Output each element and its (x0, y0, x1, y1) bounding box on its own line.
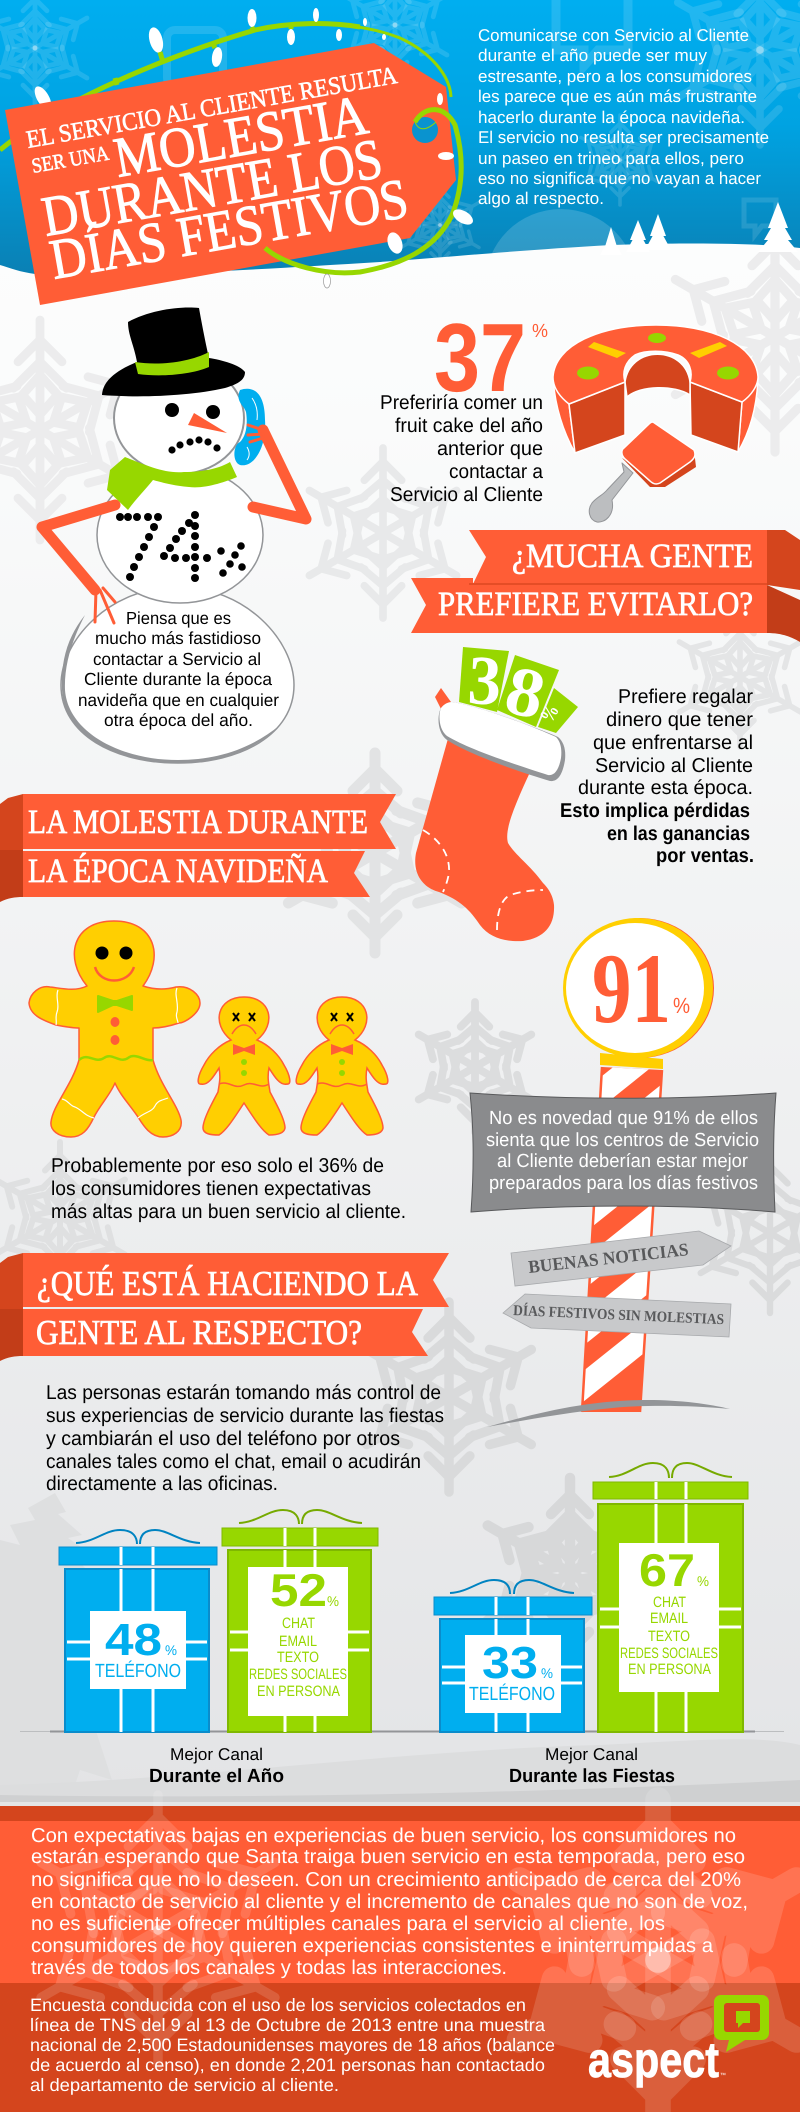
footer summary text: en contacto de servicio al cliente y el incremento de canales que no son de voz, (31, 1891, 748, 1913)
grey sign text: No es novedad que 91% de ellos (489, 1108, 758, 1129)
title: el servicio al cliente resulta: SER UNA (30, 141, 111, 178)
paragraph: control of experiences (46, 1382, 444, 1495)
37% text: anterior que (437, 438, 543, 460)
grey sign text: al Cliente deberían estar mejor (497, 1151, 749, 1172)
caption: durante el ano: Durante el Año (149, 1766, 284, 1787)
grey sign (470, 1093, 776, 1212)
footer summary text: no significa que no lo deseen. Con un crecimiento anticipado de cerca del 20% (31, 1869, 741, 1891)
money 38% (459, 642, 578, 735)
38% text: durante esta época. (578, 777, 753, 799)
banner text: LA ÉPOCA NAVIDEÑA (28, 852, 328, 890)
paragraph: control of experiences: sus experiencias de servicio durante las fiestas (46, 1405, 444, 1427)
gift: 52% otros canales: TEXTO (277, 1649, 319, 1666)
money 38%: % (535, 700, 564, 726)
hat (102, 308, 245, 396)
snowman bottom body (61, 587, 294, 763)
footer survey text: Encuesta conducida con el uso de los servicios colectados en (30, 1995, 526, 2015)
big gingerbread man (29, 921, 200, 1137)
ground line (20, 1730, 784, 1732)
background tree silhouette (0, 1493, 136, 1800)
title: el servicio al cliente resulta (24, 62, 413, 292)
gift: 33% telefono: % (541, 1665, 553, 1681)
paragraph: control of experiences: Las personas estarán tomando más control de (46, 1382, 441, 1404)
caption: durante el ano: Mejor Canal (170, 1745, 263, 1764)
banner text: PREFIERE EVITARLO? (438, 586, 753, 623)
gift: 52% otros canales: CHAT (282, 1615, 315, 1632)
banner text: ¿QUÉ ESTÁ HACIENDO LA (37, 1264, 419, 1303)
footer summary text: consumidores de hoy quieren experiencias consistentes e ininterrumpidas a (31, 1935, 714, 1957)
header intro text: estresante, pero a los consumidores (478, 67, 752, 86)
gift: 67% otros canales: REDES SOCIALES (620, 1645, 718, 1662)
header intro text: les parece que es aún más frustrante (478, 87, 757, 106)
banner text (36, 1264, 419, 1352)
gingerbread text: Probablemente por eso solo el 36% de (51, 1155, 384, 1177)
banner: que esta haciendo la gente (0, 1253, 449, 1361)
christmas lights curl over tag (265, 93, 476, 288)
38% text (560, 686, 754, 867)
38% text: por ventas. (656, 845, 754, 867)
38% text: en las ganancias (607, 823, 750, 845)
gift: 67% otros canales: EN PERSONA (628, 1661, 711, 1678)
snowman caption: Piensa que es (126, 608, 231, 628)
aspect logo (588, 1995, 769, 2088)
footer summary text: través de todos los canales y todas las interacciones. (31, 1957, 507, 1979)
38% text: Prefiere regalar (618, 686, 753, 708)
gift: 52% otros canales: REDES SOCIALES (249, 1666, 347, 1683)
37% text: Preferiría comer un (380, 392, 543, 414)
stocking cuff (439, 702, 565, 781)
stocking with 38% (415, 642, 578, 941)
grey sign text: sienta que los centros de Servicio (486, 1130, 759, 1151)
snowman head (114, 362, 244, 474)
header sky panel (0, 0, 800, 361)
phone (234, 389, 265, 465)
arrow sign: buenas noticias (511, 1231, 731, 1286)
stocking body (415, 735, 554, 941)
bow (239, 1510, 362, 1524)
north pole post (488, 1066, 730, 1427)
footer survey text: al departamento de servicio al cliente. (30, 2075, 339, 2095)
37% text: fruit cake del año (395, 415, 543, 437)
banner text (28, 804, 368, 890)
banner: la molestia durante la epoca navidena (0, 794, 396, 902)
value: 33 (482, 1637, 538, 1688)
money 38%: 3 (466, 642, 503, 721)
paragraph: control of experiences: canales tales como el chat, email o acudirán (46, 1451, 421, 1473)
footer summary text: no es suficiente ofrecer múltiples canales para el servicio al cliente, los (31, 1913, 665, 1935)
arrow sign: dias festivos sin molestias (503, 1294, 731, 1337)
money 38%: 8 (498, 652, 552, 735)
38% text: Esto implica pérdidas (560, 800, 750, 822)
74% dot number (116, 511, 246, 582)
paragraph: control of experiences: directamente a las oficinas. (46, 1473, 278, 1495)
aspect logo: ™ (720, 2072, 726, 2079)
banner: mucha gente prefiere evitarlo (411, 530, 800, 642)
footer summary text: Con expectativas bajas en experiencias de buen servicio, los consumidores no (31, 1825, 736, 1847)
gingerbread text (51, 1155, 406, 1223)
snowman caption (78, 608, 279, 730)
bow (609, 1463, 732, 1478)
title: el servicio al cliente resulta: DURANTE LOS (37, 127, 387, 249)
banner text: ¿MUCHA GENTE (512, 538, 753, 575)
gingerbread text: más altas para un buen servicio al cliente. (51, 1201, 406, 1223)
38% text: Servicio al Cliente (595, 755, 753, 777)
snowman caption: mucho más fastidioso (95, 628, 261, 648)
caption: durante el ano (149, 1745, 284, 1787)
value: 48 (105, 1614, 162, 1665)
arrow sign: dias festivos sin molestias: DÍAS FESTIVOS SIN MOLESTIAS (513, 1302, 724, 1328)
gingerbread text: los consumidores tienen expectativas (51, 1178, 371, 1200)
37% text (380, 392, 544, 506)
gift: 52% otros canales: EN PERSONA (257, 1683, 340, 1700)
bow (450, 1580, 574, 1594)
background snowflakes (0, 222, 800, 1668)
grey sign text (486, 1108, 759, 1194)
snowman (42, 308, 306, 763)
caption: durante las fiestas: Mejor Canal (545, 1745, 638, 1764)
post ground wedge (487, 1400, 730, 1427)
91 number: 91 (592, 933, 671, 1044)
logo speech icon (714, 1995, 769, 2052)
footer summary text (31, 1825, 748, 1979)
small gingerbread man 2 (296, 997, 388, 1135)
arrow sign: buenas noticias: BUENAS NOTICIAS (527, 1239, 689, 1277)
gift: 52% otros canales: EMAIL (279, 1633, 317, 1650)
caption: durante las fiestas: Durante las Fiestas (509, 1766, 675, 1787)
arms (42, 425, 306, 623)
footer panel (0, 1795, 800, 2112)
gift: 52% otros canales (222, 1510, 378, 1732)
header intro text: hacerlo durante la época navideña. (478, 108, 745, 127)
footer survey text: de acuerdo al censo), en donde 2,201 personas han contactado (30, 2055, 545, 2075)
37% text: contactar a (449, 461, 544, 483)
38% text: que enfrentarse al (593, 732, 753, 754)
grey sign text: preparados para los días festivos (489, 1173, 758, 1194)
value: 52 (270, 1564, 327, 1616)
caption: durante las fiestas (509, 1745, 675, 1787)
footer survey text: nacional de 2,500 Estadounidenses mayores de 18 años (balance (30, 2035, 555, 2055)
snowman caption: otra época del año. (104, 710, 253, 730)
title: el servicio al cliente resulta: EL SERVICIO AL CLIENTE RESULTA (24, 62, 399, 154)
title: el servicio al cliente resulta: DÍAS FESTIVOS (45, 167, 413, 292)
gift: 67% otros canales: TEXTO (648, 1628, 690, 1645)
bottom snow hills (0, 1739, 800, 1812)
header intro text: eso no significa que no vayan a hacer (478, 169, 761, 188)
gift: 67% otros canales: EMAIL (650, 1610, 688, 1627)
aspect logo: aspect (588, 2032, 719, 2088)
face (165, 403, 227, 454)
footer survey text (30, 1995, 555, 2095)
snowman caption: Cliente durante la época (84, 669, 272, 689)
header intro text: El servicio no resulta ser precisamente (478, 128, 769, 147)
white trees (600, 202, 798, 255)
header intro text: Comunicarse con Servicio al Cliente (478, 26, 749, 45)
gift: 33% telefono: TELÉFONO (469, 1683, 555, 1705)
value: 67 (639, 1544, 695, 1596)
header intro text: durante el año puede ser muy (478, 46, 708, 65)
gift: 52% otros canales: % (327, 1593, 339, 1609)
snowman caption: contactar a Servicio al (93, 649, 261, 669)
38% text: dinero que tener (606, 709, 753, 731)
christmas lights string behind tag (0, 8, 451, 150)
fruit cake (553, 325, 758, 522)
gift: 48% telefono: TELÉFONO (95, 1660, 181, 1682)
snowman caption: navideña que en cualquier (78, 690, 279, 710)
banner text (438, 538, 753, 623)
37% stat: 37 (434, 303, 526, 412)
gift: 33% telefono (434, 1580, 592, 1732)
gift: 48% telefono (59, 1530, 217, 1732)
footer survey text: línea de TNS del 9 al 13 de Octubre de 2013 entre una muestra (30, 2015, 546, 2035)
header intro text (478, 26, 769, 208)
header intro text: un paseo en trineo para ellos, pero (478, 149, 744, 168)
gift: 67% otros canales (593, 1463, 748, 1732)
scarf (107, 457, 237, 510)
banner text: LA MOLESTIA DURANTE (28, 804, 368, 841)
paragraph: control of experiences: y cambiarán el uso del teléfono por otros (46, 1428, 400, 1450)
small gingerbread man 1 (198, 997, 290, 1135)
gift: 48% telefono: % (165, 1642, 177, 1658)
37% stat: % (532, 321, 548, 342)
gift: 67% otros canales: % (697, 1573, 709, 1589)
header intro text: algo al respecto. (478, 189, 604, 208)
title: el servicio al cliente resulta: MOLESTIA (109, 83, 372, 190)
cake slice (622, 450, 696, 487)
snowman middle body (97, 467, 263, 603)
gift: 67% otros canales: CHAT (653, 1594, 686, 1611)
footer summary text: estarán esperando que Santa traiga buen servicio en esta temporada, pero eso (31, 1846, 745, 1868)
spoon (589, 463, 633, 522)
91% round sign: % (673, 993, 690, 1018)
title tag (5, 43, 456, 305)
91% round sign (563, 918, 714, 1069)
37% text: Servicio al Cliente (390, 484, 543, 506)
banner text: GENTE AL RESPECTO? (36, 1313, 362, 1352)
bow (76, 1530, 200, 1544)
